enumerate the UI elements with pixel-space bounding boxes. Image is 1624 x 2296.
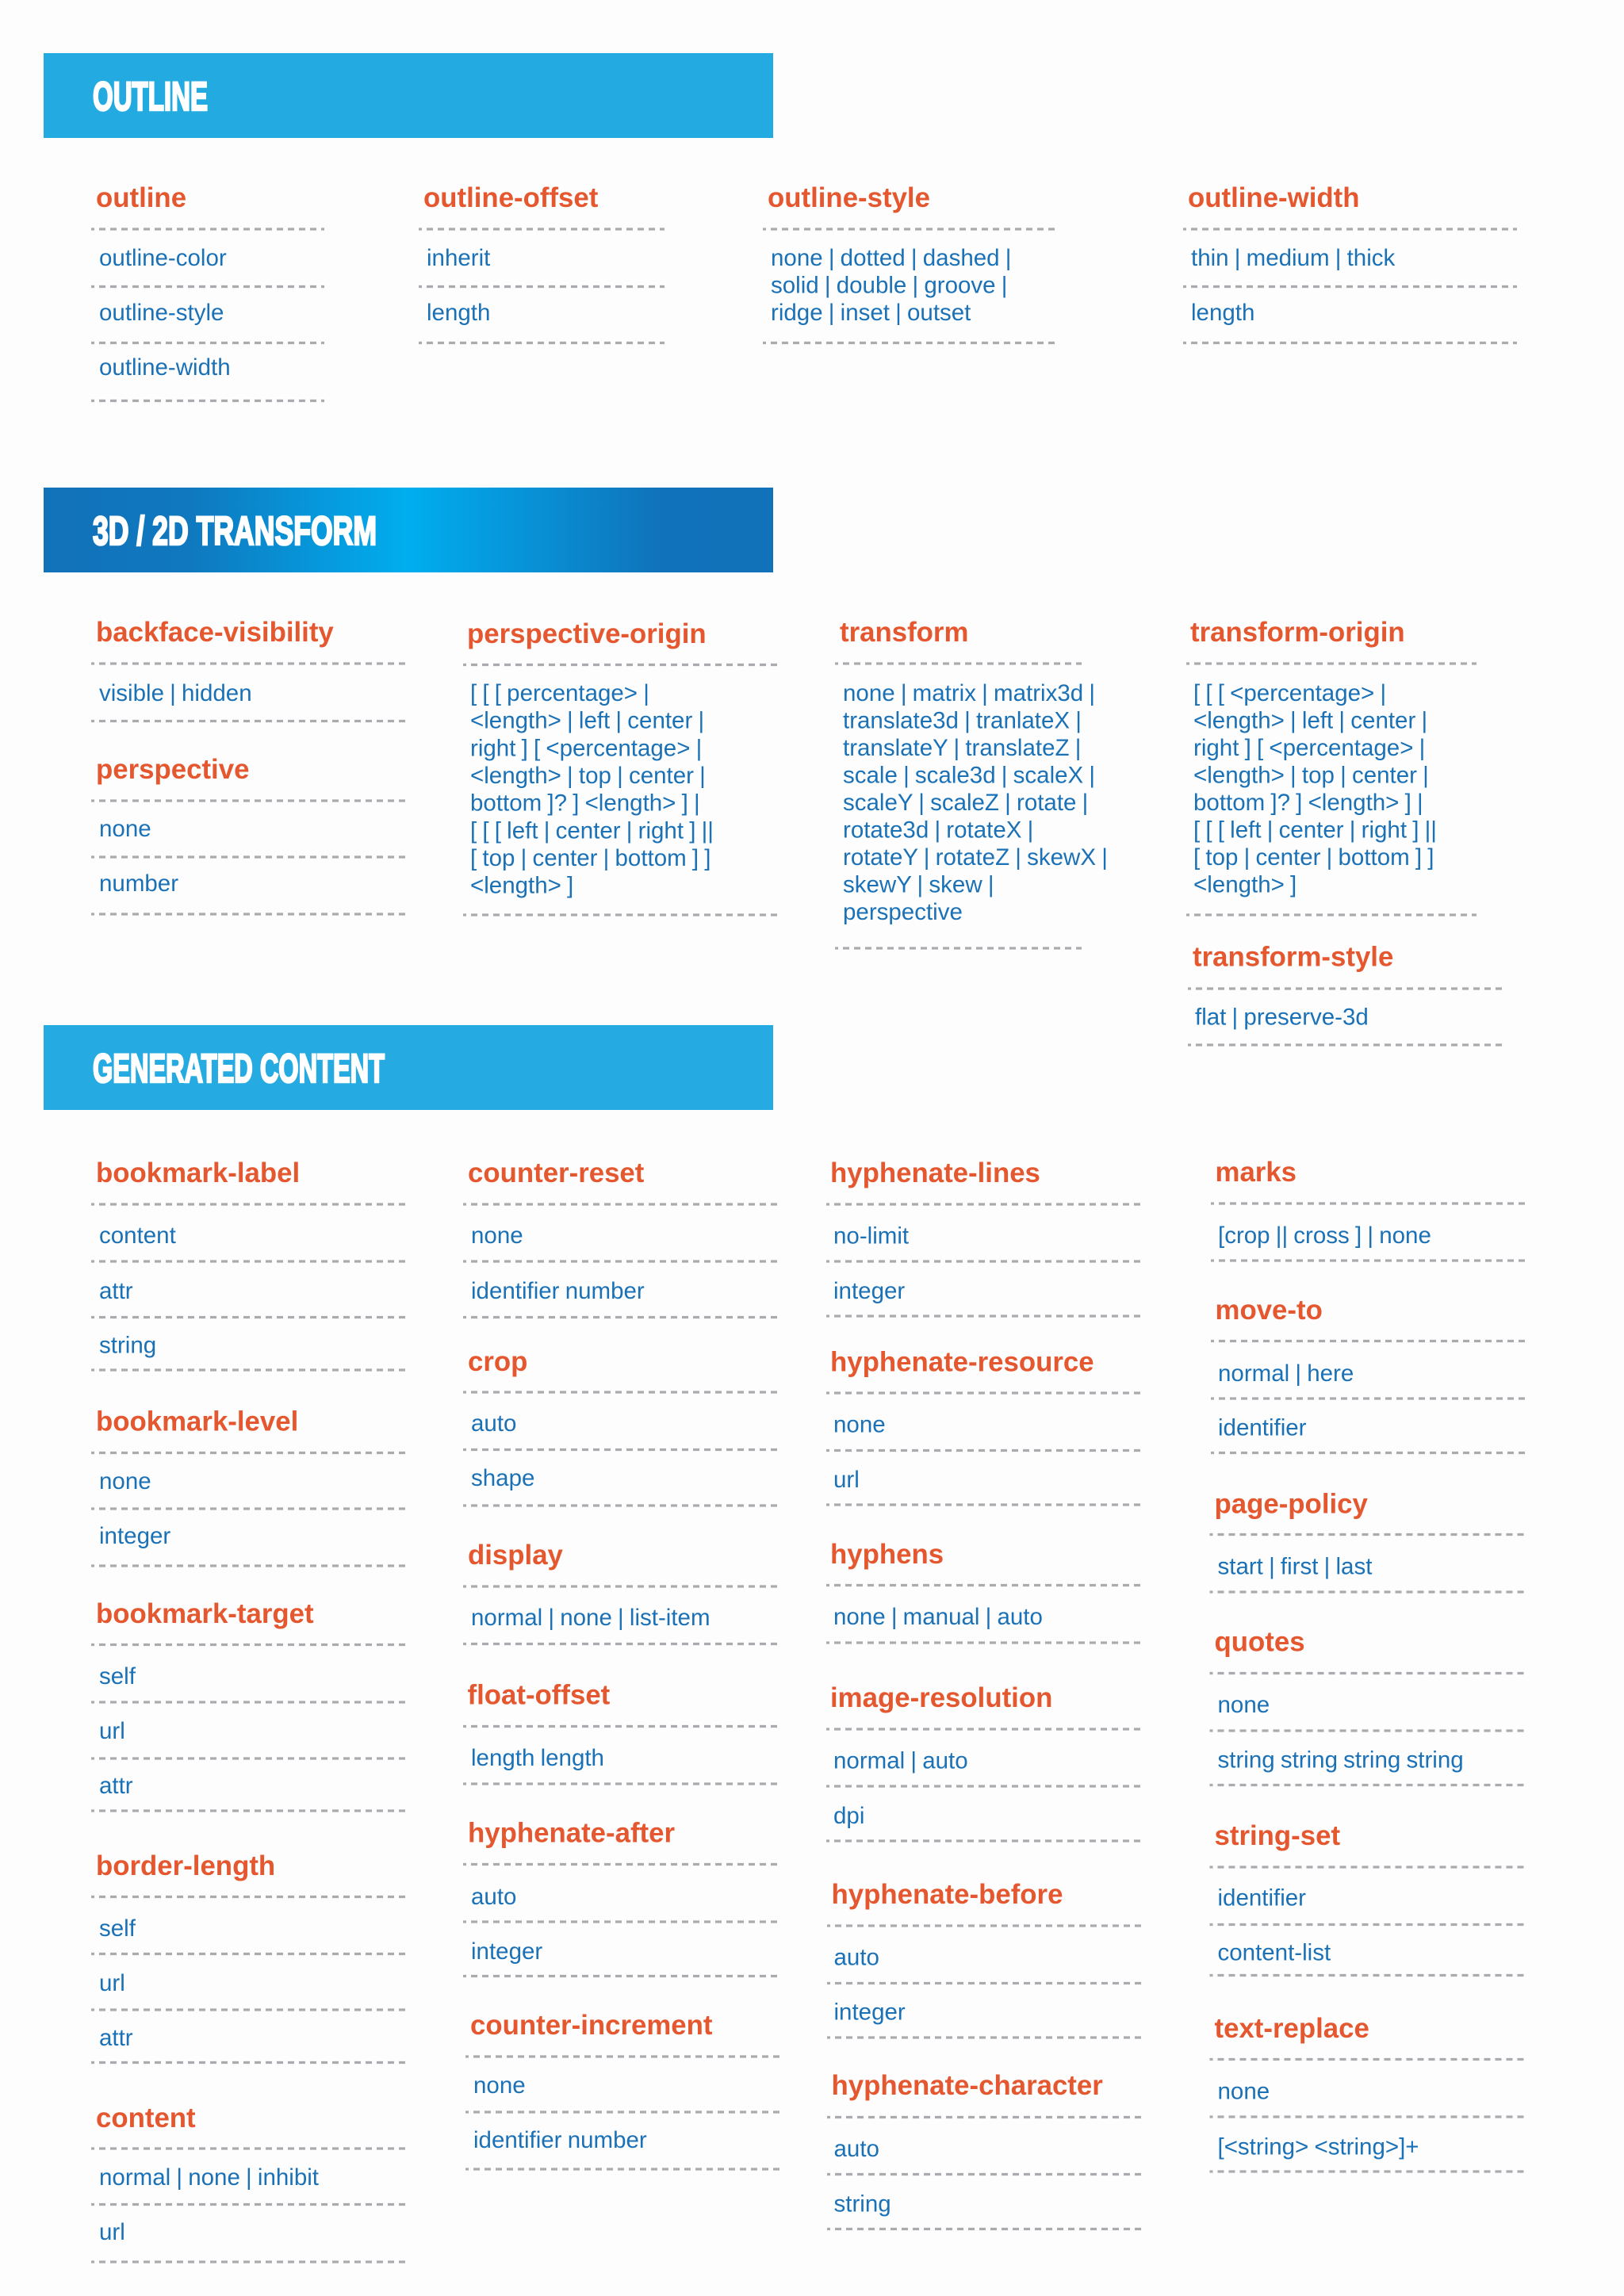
value: thin medium thick: thin | medium | thick — [1191, 245, 1396, 271]
heading: counter-increment: counter-increment — [470, 2010, 713, 2041]
value list: transform: perspective — [843, 899, 963, 925]
property: hyphenate-resource — [826, 1346, 1143, 1505]
property: move-to — [1211, 1295, 1528, 1452]
property: counter-reset — [463, 1158, 780, 1318]
value: auto: auto — [834, 1944, 879, 1971]
heading: string-set: string-set — [1215, 1820, 1340, 1851]
value: length: length — [427, 300, 490, 326]
property: transform-origin — [1186, 617, 1477, 915]
value: number: number — [99, 871, 178, 897]
value: outline-style: outline-style — [99, 300, 224, 326]
value list: transform-origin: right ] [ <percentage> | — [1193, 735, 1425, 761]
property: outline-width — [1183, 182, 1517, 342]
heading: outline: outline — [96, 182, 186, 213]
property: marks — [1211, 1157, 1528, 1261]
value: integer: integer — [833, 1278, 905, 1304]
value: no-limit: no-limit — [833, 1223, 909, 1249]
property: outline — [91, 182, 324, 401]
value: identifier number: identifier number — [473, 2127, 647, 2153]
property: counter-increment — [465, 2010, 783, 2169]
value: none: none — [99, 816, 151, 842]
heading: hyphenate-lines: hyphenate-lines — [830, 1158, 1040, 1188]
value list: transform-origin: [ top | center | bottom ] ] — [1193, 844, 1434, 871]
value list: transform: rotate3d | rotateX | — [843, 817, 1033, 844]
property: backface-visibility — [91, 617, 409, 721]
section header: 3D / 2D TRANSFORM: 3D / 2D TRANSFORM — [93, 508, 377, 553]
heading: border-length: border-length — [96, 1850, 275, 1881]
heading: transform-origin: transform-origin — [1190, 617, 1405, 648]
value list: outline styles — [771, 245, 1011, 326]
value: self: self — [99, 1915, 136, 1942]
value: none: none — [473, 2072, 526, 2099]
value list: outline styles: solid | double | groove | — [771, 273, 1007, 298]
heading: marks: marks — [1215, 1157, 1297, 1188]
property: hyphenate-after — [463, 1817, 780, 1976]
property: display — [463, 1540, 780, 1644]
value: none: none — [471, 1223, 523, 1249]
value list: perspective-origin: <length> ] — [470, 873, 573, 899]
value: normal none inhibit: normal | none | inhibit — [99, 2164, 319, 2191]
heading: move-to: move-to — [1215, 1295, 1323, 1326]
value: url: url — [833, 1467, 860, 1493]
value: start first last: start | first | last — [1218, 1554, 1372, 1579]
property: transform-style — [1188, 942, 1505, 1045]
property: page-policy — [1210, 1489, 1526, 1592]
value list: transform: translate3d | tranlateX | — [843, 707, 1082, 734]
value list: perspective-origin: [ [ [ percentage> | — [470, 680, 649, 706]
value: integer: integer — [471, 1938, 542, 1965]
value: string: string — [99, 1332, 156, 1359]
value list: transform-origin: <length> | left | center | — [1193, 707, 1427, 734]
property: perspective — [91, 754, 409, 914]
property: hyphenate-before — [827, 1879, 1144, 2038]
value: inherit: inherit — [427, 245, 490, 271]
value: identifier: identifier — [1218, 1885, 1306, 1911]
value: length: length — [1191, 300, 1254, 326]
heading: bookmark-target: bookmark-target — [96, 1598, 314, 1629]
value list: perspective-origin: [ top | center | bottom ] ] — [470, 845, 710, 871]
value: content: content — [99, 1223, 176, 1249]
value list: transform-origin: [ [ [ <percentage> | — [1193, 680, 1386, 706]
heading: hyphens: hyphens — [830, 1539, 944, 1570]
heading: image-resolution: image-resolution — [830, 1682, 1052, 1713]
value: crop cross none: [crop || cross ] | none — [1218, 1223, 1431, 1249]
heading: counter-reset: counter-reset — [468, 1158, 645, 1188]
value: normal auto: normal | auto — [833, 1747, 968, 1774]
heading: perspective-origin: perspective-origin — [467, 618, 707, 649]
property: perspective-origin — [463, 618, 780, 915]
heading: outline-offset: outline-offset — [423, 182, 599, 213]
value: string pair: [<string> <string>]+ — [1218, 2134, 1419, 2160]
value: integer: integer — [99, 1523, 170, 1549]
panel: 3D / 2D transform — [44, 488, 1505, 1045]
value: integer: integer — [834, 1999, 906, 2025]
heading: hyphenate-before: hyphenate-before — [831, 1879, 1063, 1910]
value list: transform: scale | scale3d | scaleX | — [843, 763, 1095, 788]
value: visible hidden: visible | hidden — [99, 680, 252, 706]
section header: OUTLINE — [44, 53, 773, 138]
heading: hyphenate-resource: hyphenate-resource — [830, 1346, 1094, 1378]
heading: crop: crop — [468, 1346, 527, 1377]
property: hyphenate-character — [827, 2070, 1144, 2229]
heading: hyphenate-after: hyphenate-after — [468, 1817, 675, 1849]
value: none: none — [1218, 2079, 1270, 2104]
property: transform — [835, 617, 1108, 948]
value list: transform: translateY | translateZ | — [843, 735, 1081, 761]
heading: quotes: quotes — [1215, 1627, 1305, 1657]
heading: perspective: perspective — [96, 754, 249, 785]
heading: bookmark-level: bookmark-level — [96, 1406, 298, 1437]
value: attr: attr — [99, 1278, 133, 1304]
value: auto: auto — [471, 1410, 516, 1437]
value: attr: attr — [99, 1773, 133, 1799]
value list: transform: none | matrix | matrix3d | — [843, 680, 1095, 706]
value: auto: auto — [471, 1884, 516, 1910]
heading: hyphenate-character: hyphenate-character — [831, 2070, 1103, 2101]
section header: GENERATED CONTENT: GENERATED CONTENT — [93, 1046, 385, 1091]
value: none: none — [1218, 1692, 1270, 1718]
value: none: none — [833, 1411, 886, 1438]
value list: transform-origin: <length> | top | center | — [1193, 763, 1429, 788]
property: crop — [463, 1346, 780, 1506]
value: none manual auto: none | manual | auto — [833, 1604, 1043, 1630]
heading: transform: transform — [840, 617, 968, 648]
value: normal here: normal | here — [1218, 1360, 1354, 1387]
value list: transform-origin: [ [ [ left | center | right ] || — [1193, 817, 1437, 844]
panel: outline — [44, 53, 1517, 401]
value: flat preserve-3d: flat | preserve-3d — [1195, 1004, 1369, 1031]
heading: page-policy: page-policy — [1215, 1489, 1369, 1519]
value list: transform-origin: <length> ] — [1193, 872, 1297, 897]
value: url: url — [99, 2219, 125, 2245]
value list: outline styles: none | dotted | dashed | — [771, 245, 1011, 271]
property: content — [91, 2103, 409, 2262]
value: auto: auto — [834, 2136, 879, 2162]
section header: GENERATED CONTENT — [44, 1025, 773, 1110]
value list: transform-origin — [1193, 680, 1437, 897]
heading: outline-width: outline-width — [1188, 182, 1359, 213]
property: text-replace — [1210, 2013, 1526, 2172]
value list: transform: scaleY | scaleZ | rotate | — [843, 790, 1088, 816]
value: shape: shape — [471, 1465, 534, 1491]
value: normal none list-item: normal | none | list-item — [471, 1605, 710, 1631]
property: float-offset — [463, 1679, 780, 1784]
heading: backface-visibility: backface-visibility — [96, 617, 334, 648]
value: outline-color: outline-color — [99, 245, 227, 271]
property: string-set — [1210, 1820, 1526, 1976]
value: string string string string: string string string string — [1218, 1747, 1464, 1773]
value: length length: length length — [471, 1745, 604, 1771]
value: identifier number: identifier number — [471, 1278, 645, 1304]
property: bookmark-label — [91, 1158, 409, 1370]
value list: transform-origin: bottom ]? ] <length> ] | — [1193, 790, 1423, 816]
section header: 3D / 2D TRANSFORM — [44, 488, 773, 572]
value: url: url — [99, 1970, 125, 1996]
value list: outline styles: ridge | inset | outset — [771, 300, 971, 326]
value list: transform — [843, 680, 1108, 925]
property: bookmark-level — [91, 1406, 409, 1566]
value: none: none — [99, 1468, 151, 1494]
value: url: url — [99, 1718, 125, 1744]
heading: float-offset: float-offset — [468, 1679, 611, 1711]
property: hyphens — [826, 1539, 1143, 1643]
property: hyphenate-lines — [826, 1158, 1143, 1316]
property: border-length — [91, 1850, 409, 2063]
value list: perspective-origin: right ] [ <percentage> | — [470, 735, 702, 761]
value: dpi: dpi — [833, 1803, 864, 1829]
heading: text-replace: text-replace — [1215, 2013, 1369, 2044]
value: content-list: content-list — [1218, 1939, 1331, 1966]
section header: OUTLINE: OUTLINE — [93, 74, 208, 119]
property: outline-style — [763, 182, 1055, 342]
value list: perspective-origin: bottom ]? ] <length> ] | — [470, 790, 700, 817]
value: identifier: identifier — [1218, 1414, 1307, 1441]
value list: perspective-origin — [470, 680, 714, 899]
heading: bookmark-label: bookmark-label — [96, 1158, 300, 1188]
property: image-resolution — [826, 1682, 1143, 1841]
value list: transform: rotateY | rotateZ | skewX | — [843, 844, 1108, 871]
value: outline-width: outline-width — [99, 354, 231, 381]
value: attr: attr — [99, 2025, 133, 2051]
value: self: self — [99, 1663, 136, 1689]
heading: transform-style: transform-style — [1193, 942, 1393, 972]
value list: perspective-origin: [ [ [ left | center | right ] || — [470, 817, 714, 844]
heading: outline-style: outline-style — [768, 182, 930, 213]
property: bookmark-target — [91, 1598, 409, 1811]
property: quotes — [1210, 1627, 1526, 1785]
value list: perspective-origin: <length> | top | center | — [470, 763, 706, 789]
panel: generated content — [44, 1025, 1528, 2262]
value list: transform: skewY | skew | — [843, 872, 994, 897]
heading: content: content — [96, 2103, 196, 2133]
property: outline-offset — [419, 182, 665, 342]
heading: display: display — [468, 1540, 564, 1571]
value: string: string — [834, 2191, 891, 2217]
value list: perspective-origin: <length> | left | center | — [470, 708, 704, 734]
